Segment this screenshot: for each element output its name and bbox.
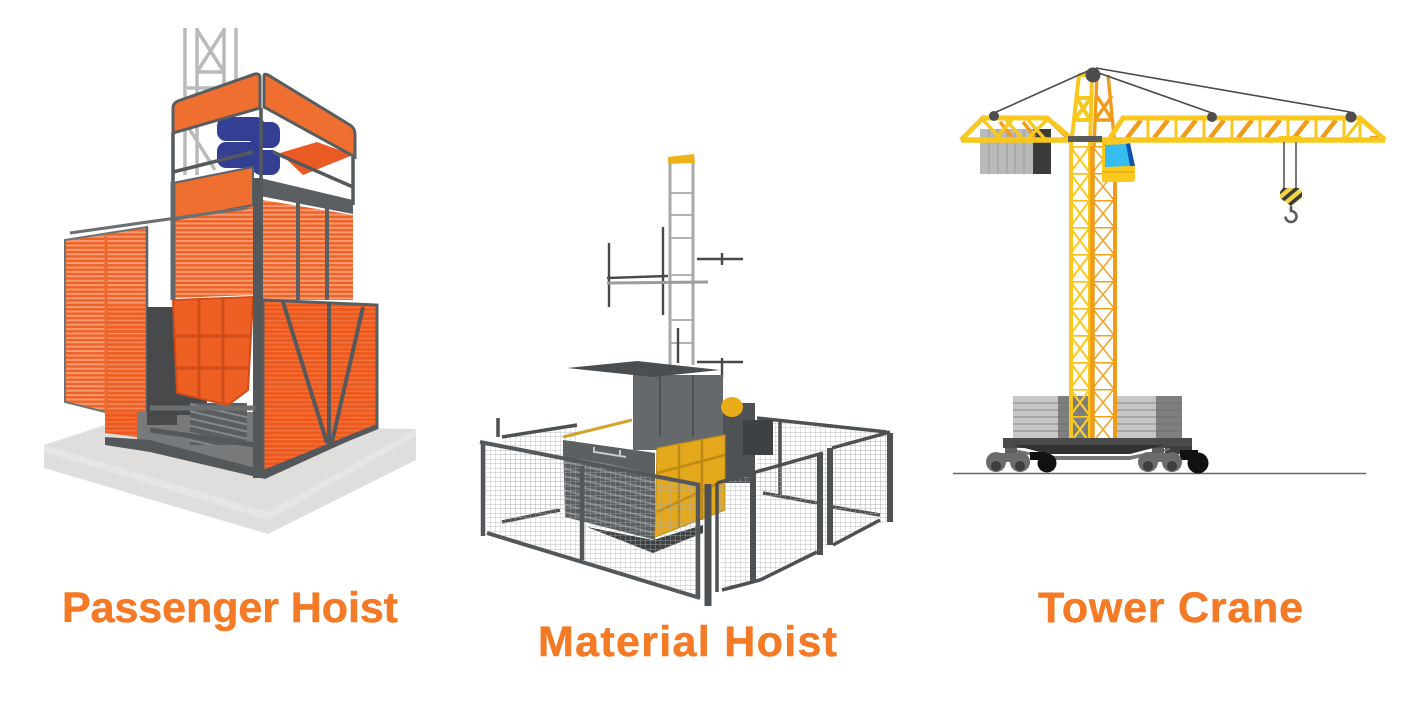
cabin side mesh [263,200,353,300]
cage [563,440,655,540]
canopy front panel [173,74,260,133]
jib [1088,118,1385,140]
label: Tower Crane: Tower Crane [1038,584,1303,632]
illustration: material hoist [480,154,890,606]
illustration: passenger hoist [44,28,416,534]
counterweight [980,129,1051,174]
trolley [1278,136,1302,142]
counter jib [961,118,1071,140]
concrete blocks [1013,396,1182,438]
mast cap [668,154,695,164]
concrete base [44,425,416,534]
yellow motor [721,397,743,417]
label: Passenger Hoist: Passenger Hoist [62,584,398,632]
label: Material Hoist: Material Hoist [538,618,837,666]
tower [1071,146,1115,438]
machine body [633,375,723,450]
door rail [70,208,247,233]
lower right mesh [263,300,377,474]
right front fence [717,432,890,592]
base frame [105,424,377,479]
cables [994,68,1350,113]
cabin [1102,142,1135,182]
canopy underside panel [280,142,353,175]
pulleys [989,68,1356,122]
carriage [1003,438,1192,460]
front fence [482,442,700,598]
left swing door [65,227,147,412]
roof [567,361,720,377]
machine dark body [723,403,755,483]
corner post [253,178,263,478]
antenna arms [607,227,743,378]
illustration: tower crane [953,68,1385,474]
wheels [986,448,1208,474]
lower left panel [105,412,137,437]
hook [1286,206,1296,222]
yellow gate [655,435,725,537]
springs [190,403,247,445]
front mesh panel [175,205,253,298]
platform [587,525,703,553]
frame rails [173,108,353,205]
hook ropes [1284,142,1296,188]
mast [670,160,693,365]
solid front panel [173,167,253,220]
yellow rail [563,420,632,437]
canopy side panel [264,74,355,157]
mast [185,28,236,175]
control box [743,420,773,455]
blue motors [217,117,280,175]
dark floor [137,412,258,470]
dark interior [147,307,177,425]
tower head [1071,75,1115,146]
back fence [757,418,887,515]
jib bar [1068,136,1102,142]
orange gate [173,297,253,405]
hook block [1280,188,1302,206]
ground line [953,472,1366,474]
